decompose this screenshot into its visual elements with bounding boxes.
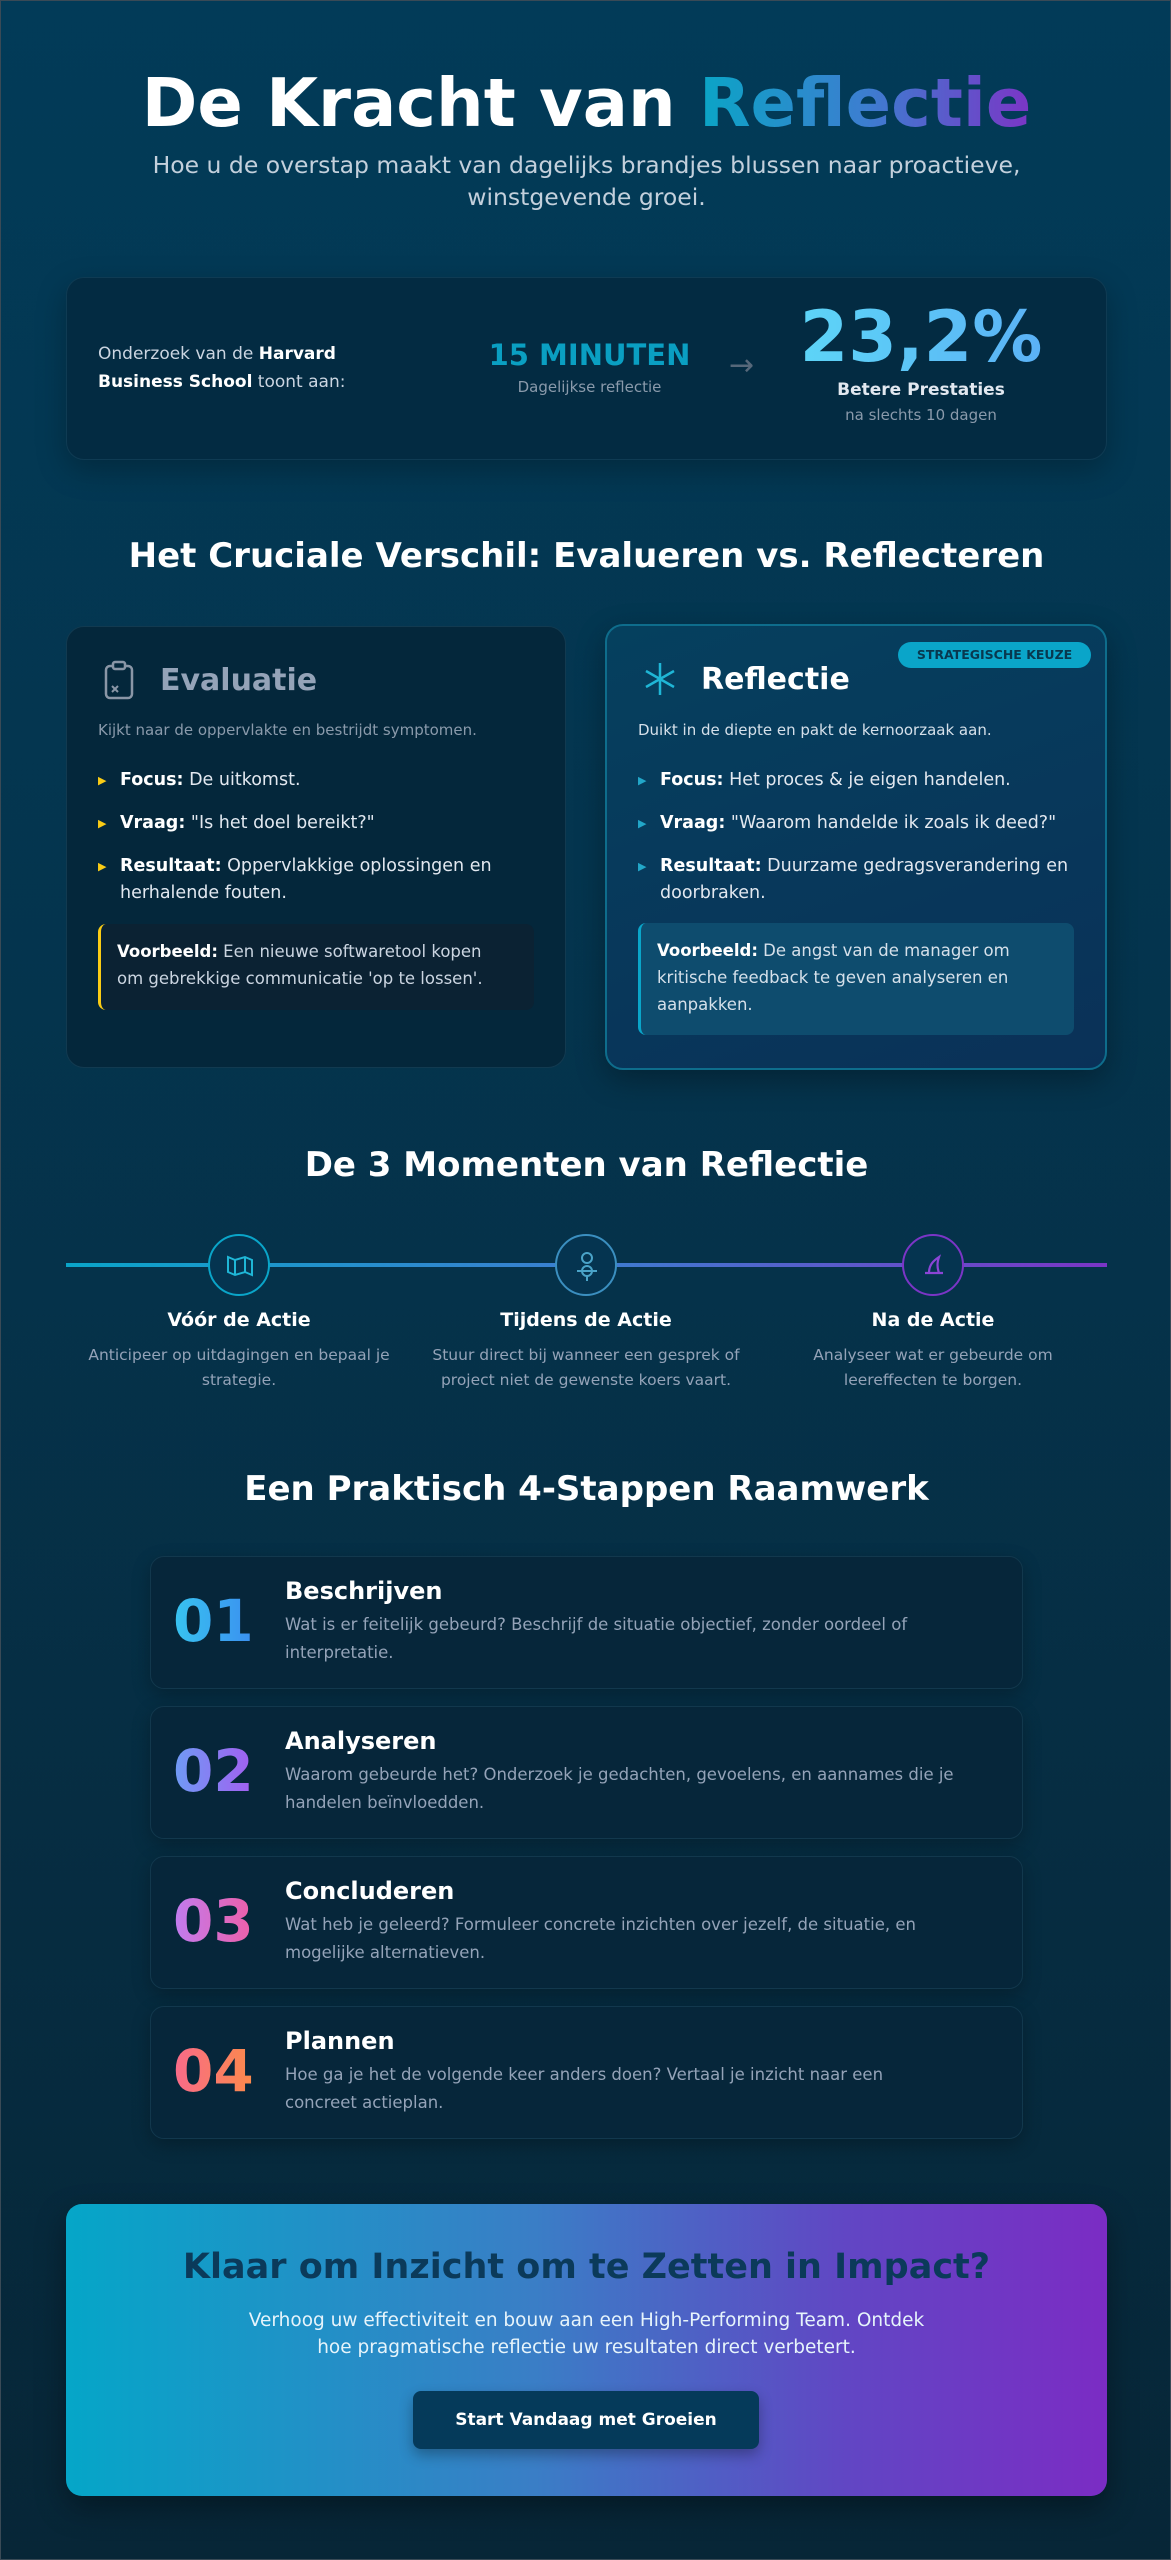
step 02 (150, 1706, 1023, 1839)
step 01: Wat is er feitelijk gebeurd? Beschrijf de situatie objectief, zonder oordeel of interpretatie. (285, 1615, 907, 1662)
icon: clipboard (104, 660, 134, 700)
icon: sparkle (646, 663, 674, 695)
stat: 23,2%: Betere Prestaties (837, 380, 1005, 400)
step 03: 03 (173, 1887, 254, 1955)
list: bullets: Vraag: "Is het doel bereikt?" (120, 813, 375, 833)
icon: compass (555, 1234, 617, 1296)
stat: 15 minuten: Dagelijkse reflectie (518, 378, 661, 396)
text: description: Duikt in de diepte en pakt de kernoorzaak aan. (638, 721, 992, 739)
cta heading: Klaar om Inzicht om te Zetten in Impact? (183, 2247, 990, 2287)
callout: voorbeeld: Voorbeeld: De angst van de manager om kritische feedback te geven analyseren en aanpakken. (657, 941, 1010, 1014)
step 02: Analyseren (285, 1727, 436, 1755)
step 04: Plannen (285, 2027, 395, 2055)
text: research intro: Onderzoek van de Harvard Business School toont aan: (98, 344, 345, 392)
heading: evaluatie: Evaluatie (160, 663, 317, 698)
list: bullets: Resultaat: Duurzame gedragsverandering en doorbraken. (660, 856, 1068, 903)
moment: tijdens: Tijdens de Actie (500, 1309, 672, 1331)
moment: tijdens (432, 1309, 740, 1389)
list: bullets: Focus: De uitkomst. (120, 770, 301, 790)
timeline (66, 1263, 1107, 1267)
moment: voor: Vóór de Actie (167, 1309, 311, 1331)
heading: reflectie: Reflectie (701, 662, 850, 697)
list: bullets: Resultaat: Oppervlakkige oplossingen en herhalende fouten. (120, 856, 492, 903)
moment: tijdens: Stuur direct bij wanneer een gesprek of project niet de gewenste koers vaart. (432, 1346, 740, 1389)
subtitle: Hoe u de overstap maakt van dagelijks brandjes blussen naar proactieve, winstgevende groei. (153, 151, 1020, 211)
step 04: Hoe ga je het de volgende keer anders doen? Vertaal je inzicht naar een concreet actieplan. (285, 2065, 883, 2112)
badge (898, 642, 1091, 668)
stat: 15 minuten (489, 338, 690, 396)
icon: map (208, 1234, 270, 1296)
step 04: 04 (173, 2037, 254, 2105)
icon: sail (902, 1234, 964, 1296)
step 01 (150, 1556, 1023, 1689)
panel: cta (66, 2204, 1107, 2496)
heading: raamwerk: Een Praktisch 4-Stappen Raamwerk (244, 1469, 929, 1509)
stat: 23,2% (800, 296, 1042, 424)
callout: voorbeeld (98, 924, 534, 1010)
title: De Kracht van Reflectie (142, 64, 1031, 142)
step 03: Concluderen (285, 1877, 454, 1905)
line (66, 1263, 1107, 1267)
moment: voor: Anticipeer op uitdagingen en bepaal je strategie. (88, 1346, 390, 1389)
panel: reflectie (605, 624, 1107, 1070)
moment: voor (88, 1309, 390, 1389)
list: bullets: Focus: Het proces & je eigen handelen. (660, 770, 1011, 790)
list: bullets (638, 770, 1068, 903)
panel: evaluatie (66, 626, 566, 1068)
stat: 23,2%: na slechts 10 dagen (845, 406, 997, 424)
callout: voorbeeld (638, 923, 1074, 1035)
badge: STRATEGISCHE KEUZE (917, 647, 1072, 662)
arrow: → (729, 348, 754, 383)
step 04 (150, 2006, 1023, 2139)
heading: 3 momenten: De 3 Momenten van Reflectie (305, 1145, 868, 1185)
button: Start Vandaag met Groeien (455, 2410, 717, 2430)
step 03 (150, 1856, 1023, 1989)
step 03: Wat heb je geleerd? Formuleer concrete inzichten over jezelf, de situatie, en mogelijke alternatieven. (285, 1915, 916, 1962)
step 02: 02 (173, 1737, 254, 1805)
step 02: Waarom gebeurde het? Onderzoek je gedachten, gevoelens, en aannames die je handelen beïnvloedden. (285, 1765, 954, 1812)
stat: 15 minuten: 15 MINUTEN (489, 338, 690, 372)
list: bullets (98, 770, 492, 903)
moment: na: Analyseer wat er gebeurde om leereffecten te borgen. (813, 1346, 1053, 1389)
cta text: Verhoog uw effectiviteit en bouw aan een High-Performing Team. Ontdek hoe pragmatische reflectie uw resultaten direct verbetert. (249, 2310, 924, 2358)
moment: na (813, 1309, 1053, 1389)
text: description: Kijkt naar de oppervlakte en bestrijdt symptomen. (98, 721, 477, 739)
step 01: Beschrijven (285, 1577, 442, 1605)
stat: 23,2%: 23,2% (800, 296, 1042, 378)
callout: voorbeeld: Voorbeeld: Een nieuwe softwaretool kopen om gebrekkige communicatie 'op te lossen'. (117, 942, 483, 988)
button (413, 2391, 759, 2449)
moment: na: Na de Actie (872, 1309, 994, 1331)
heading: verschil: Het Cruciale Verschil: Evalueren vs. Reflecteren (129, 536, 1044, 576)
list: bullets: Vraag: "Waarom handelde ik zoals ik deed?" (660, 813, 1056, 833)
step 01: 01 (173, 1587, 254, 1655)
panel: stat card (66, 277, 1107, 460)
